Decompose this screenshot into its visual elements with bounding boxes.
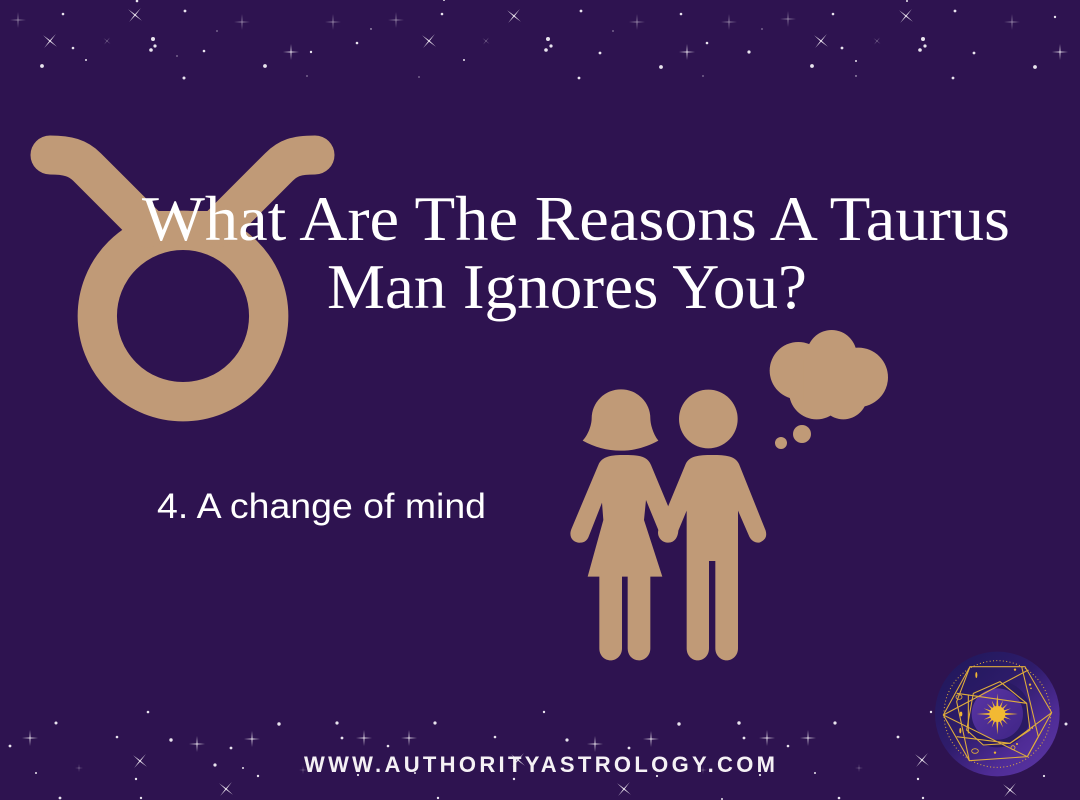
man [658,390,766,660]
star field: top [10,0,1068,80]
icon: Taurus symbol [50,155,315,402]
woman [570,389,678,660]
website url: WWW.AUTHORITYASTROLOGY.COM [304,752,775,777]
text: reason number four: 4. A change of mind [157,487,486,526]
icon: couple holding hands with thought bubble [570,330,888,660]
thought bubble [770,330,888,449]
title: Man Ignores You? [327,252,807,322]
title: What Are The Reasons A Taurus [142,184,1010,254]
logo badge: zodiac wheel with sun [935,652,1060,776]
title [142,184,1010,322]
star field: bottom [9,711,1068,800]
